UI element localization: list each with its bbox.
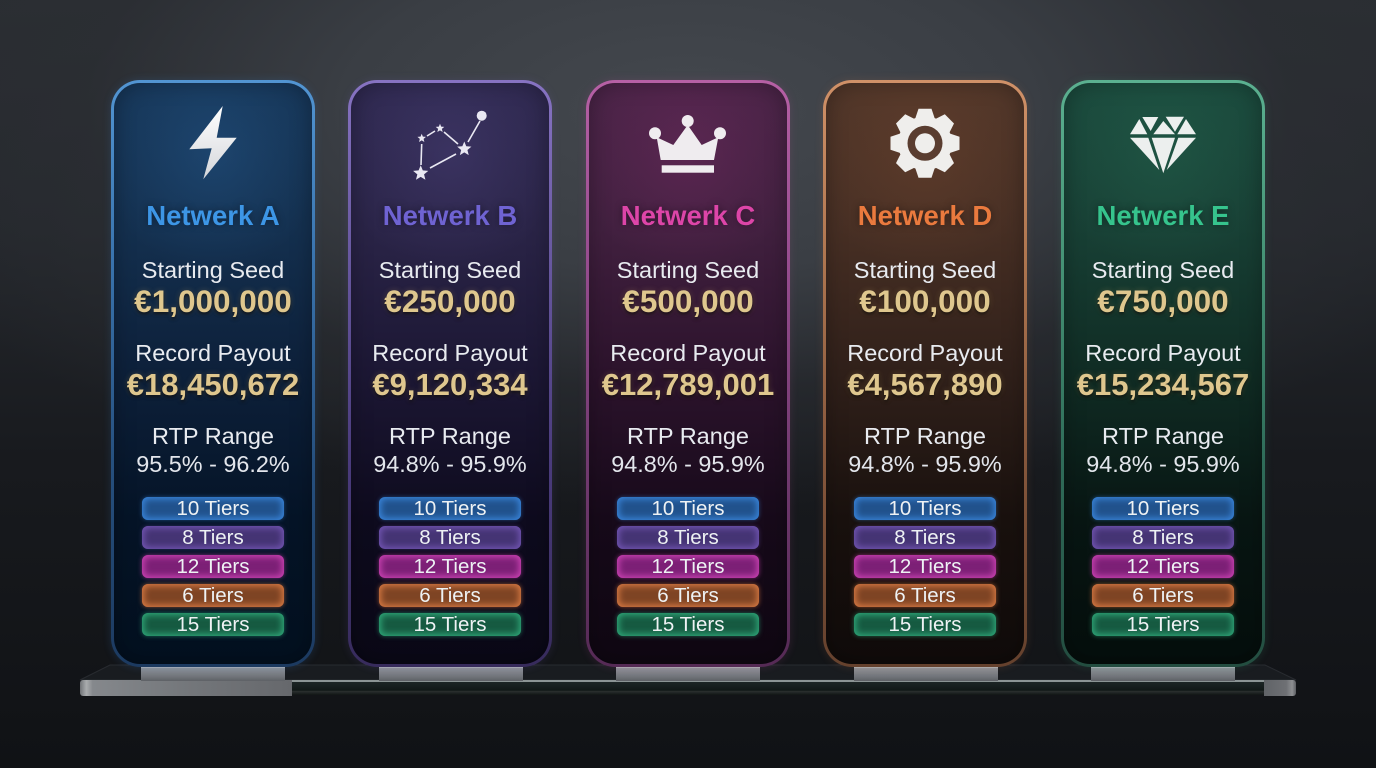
value: RTP range: 95.5% - 96.2% [136, 451, 290, 477]
panel: Netwerk E [1061, 80, 1265, 667]
heading: Netwerk A [146, 200, 280, 231]
tier pill: 10: 10 Tiers [1127, 497, 1199, 520]
tier pill: 10: 10 Tiers [652, 497, 724, 520]
tier pill: 10 [379, 497, 521, 520]
label: record payout: Record Payout [1085, 340, 1241, 366]
stand C [616, 667, 760, 681]
tier pill: 15: 15 Tiers [414, 613, 486, 636]
value: RTP range: 94.8% - 95.9% [373, 451, 527, 477]
tier pill: 12 [379, 555, 521, 578]
label: starting seed: Starting Seed [617, 257, 759, 283]
tier pill: 15 [379, 613, 521, 636]
tier pill: 15 [1092, 613, 1234, 636]
value: record payout: €12,789,001 [602, 367, 774, 402]
tier pill: 10 [1092, 497, 1234, 520]
tier pill: 10 [854, 497, 996, 520]
tier pill: 12: 12 Tiers [1127, 555, 1199, 578]
label: RTP range: RTP Range [389, 423, 511, 449]
tier pill: 6: 6 Tiers [1132, 584, 1194, 607]
stand D [854, 667, 998, 681]
tier pill: 8 [1092, 526, 1234, 549]
tier pill: 8 [617, 526, 759, 549]
label: starting seed: Starting Seed [1092, 257, 1234, 283]
tier pill: 10: 10 Tiers [177, 497, 249, 520]
value: record payout: €15,234,567 [1077, 367, 1249, 402]
tier pill: 12 [617, 555, 759, 578]
value: RTP range: 94.8% - 95.9% [1086, 451, 1240, 477]
tier pill: 6: 6 Tiers [657, 584, 719, 607]
value: starting seed: €1,000,000 [134, 283, 292, 319]
value: starting seed: €250,000 [384, 283, 516, 319]
tier pill: 8 [142, 526, 284, 549]
heading: Netwerk B [383, 200, 517, 231]
icon: diamond [1130, 116, 1196, 174]
left metal bracket [80, 680, 292, 696]
tier pill: 15 [617, 613, 759, 636]
value: starting seed: €100,000 [859, 283, 991, 319]
tier pill: 15: 15 Tiers [1127, 613, 1199, 636]
tier pill: 6 [617, 584, 759, 607]
label: record payout: Record Payout [847, 340, 1003, 366]
tier pill: 6 [142, 584, 284, 607]
tier pill: 12 [1092, 555, 1234, 578]
tier pill: 12 [854, 555, 996, 578]
glass front edge [292, 680, 1265, 695]
label: starting seed: Starting Seed [379, 257, 521, 283]
tier pill: 8: 8 Tiers [419, 526, 481, 549]
panel: Netwerk D [823, 80, 1027, 667]
label: RTP range: RTP Range [1102, 423, 1224, 449]
tier pill: 8 [854, 526, 996, 549]
tier pill: 15 [854, 613, 996, 636]
tier pill: 12: 12 Tiers [889, 555, 961, 578]
icon: lightning bolt [189, 106, 237, 180]
tier pill: 12 [142, 555, 284, 578]
tier pill: 10 [142, 497, 284, 520]
tier pill: 8 [379, 526, 521, 549]
tier pill: 8: 8 Tiers [182, 526, 244, 549]
label: record payout: Record Payout [135, 340, 291, 366]
label: RTP range: RTP Range [627, 423, 749, 449]
tier pill: 15: 15 Tiers [652, 613, 724, 636]
heading: Netwerk E [1096, 200, 1229, 231]
tier pill: 8: 8 Tiers [894, 526, 956, 549]
value: record payout: €18,450,672 [127, 367, 299, 402]
tier pill: 12: 12 Tiers [414, 555, 486, 578]
tier pill: 8: 8 Tiers [657, 526, 719, 549]
panel: Netwerk C [586, 80, 790, 667]
tier pill: 10: 10 Tiers [889, 497, 961, 520]
panel: Netwerk A [111, 80, 315, 667]
tier pill: 8: 8 Tiers [1132, 526, 1194, 549]
label: starting seed: Starting Seed [854, 257, 996, 283]
shelf top surface [80, 664, 1296, 680]
shelf [80, 664, 1296, 696]
label: record payout: Record Payout [610, 340, 766, 366]
tier pill: 15: 15 Tiers [889, 613, 961, 636]
value: RTP range: 94.8% - 95.9% [848, 451, 1002, 477]
value: starting seed: €750,000 [1097, 283, 1229, 319]
stand E [1091, 667, 1235, 681]
value: record payout: €4,567,890 [847, 367, 1003, 402]
label: record payout: Record Payout [372, 340, 528, 366]
icon: gear [890, 108, 960, 178]
tier pill: 6 [379, 584, 521, 607]
stand A [141, 667, 285, 681]
value: record payout: €9,120,334 [372, 367, 528, 402]
tier pill: 12: 12 Tiers [177, 555, 249, 578]
tier pill: 15 [142, 613, 284, 636]
tier pill: 6: 6 Tiers [894, 584, 956, 607]
tier pill: 10 [617, 497, 759, 520]
icon: crown [649, 115, 726, 173]
tier pill: 6 [1092, 584, 1234, 607]
tier pill: 6: 6 Tiers [419, 584, 481, 607]
value: starting seed: €500,000 [622, 283, 754, 319]
heading: Netwerk C [621, 200, 755, 231]
tier pill: 6 [854, 584, 996, 607]
stand B [379, 667, 523, 681]
panel: Netwerk B [348, 80, 552, 667]
tier pill: 12: 12 Tiers [652, 555, 724, 578]
label: starting seed: Starting Seed [142, 257, 284, 283]
icon: constellation [413, 110, 487, 180]
label: RTP range: RTP Range [864, 423, 986, 449]
heading: Netwerk D [858, 200, 992, 231]
tier pill: 15: 15 Tiers [177, 613, 249, 636]
tier pill: 10: 10 Tiers [414, 497, 486, 520]
value: RTP range: 94.8% - 95.9% [611, 451, 765, 477]
right metal bracket [1264, 680, 1296, 696]
label: RTP range: RTP Range [152, 423, 274, 449]
tier pill: 6: 6 Tiers [182, 584, 244, 607]
